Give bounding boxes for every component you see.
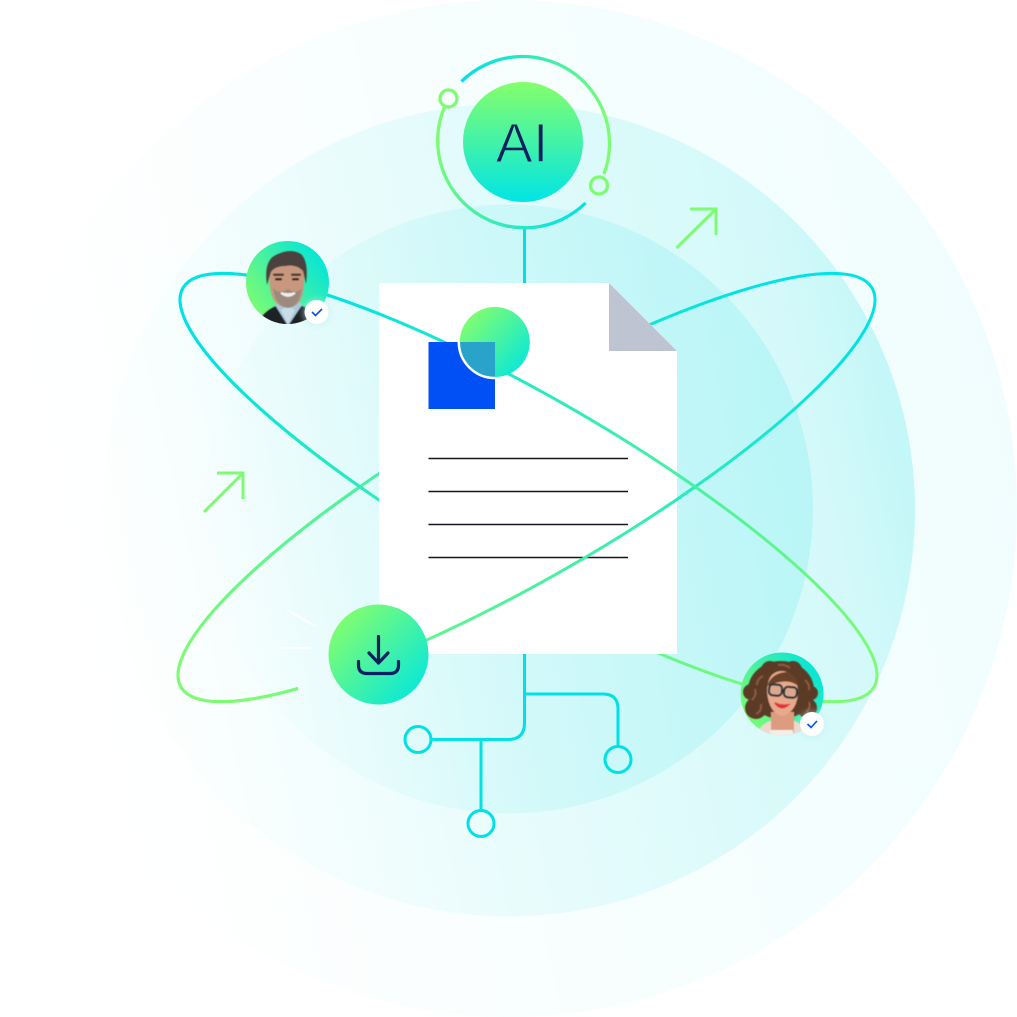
orbit line 2 behind document	[176, 272, 876, 704]
node left	[405, 726, 431, 752]
logo shape: blue square and gradient circle	[428, 306, 531, 409]
node right	[605, 746, 631, 772]
verified badge	[302, 298, 330, 326]
arrow up right	[676, 209, 716, 248]
ring node left	[440, 90, 457, 107]
verified badge	[798, 711, 826, 739]
download button	[328, 604, 428, 704]
orbit line 1 behind document	[138, 210, 919, 765]
text lines	[428, 458, 628, 558]
connector from AI to document	[523, 228, 526, 284]
AI circle: AI	[496, 111, 548, 174]
AI orbit ring	[438, 57, 610, 228]
orbit line 2 front arc over document	[176, 488, 696, 704]
avatar: man	[246, 241, 330, 326]
ring node right	[590, 177, 608, 194]
orbit line 1 front arc over document	[178, 272, 699, 488]
document page	[379, 283, 677, 654]
avatar: woman	[740, 652, 826, 739]
white speed streaks	[278, 610, 315, 648]
icon: download	[358, 636, 398, 674]
node bottom	[468, 810, 494, 836]
arrow up right left	[204, 473, 243, 512]
curly hair	[743, 661, 818, 719]
circuit connectors	[405, 654, 631, 836]
folded corner	[609, 283, 677, 351]
AI circle	[463, 82, 583, 202]
